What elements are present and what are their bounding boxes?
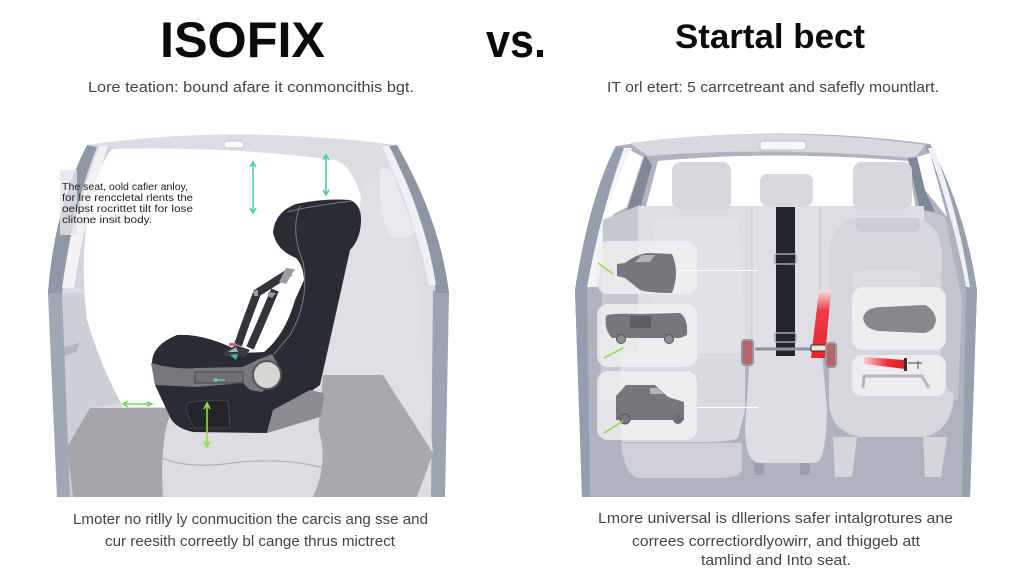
- recline knob: [253, 361, 281, 389]
- side pocket: [187, 400, 230, 428]
- center black strap: [755, 207, 830, 356]
- center seat back: [752, 206, 820, 353]
- caption left: Lmoter no ritlly ly conmucition the carcis ang sse and: [73, 511, 428, 528]
- center seat cushion: [162, 420, 323, 497]
- window opening: [84, 148, 362, 407]
- floor left: [67, 408, 170, 497]
- floor right: [313, 375, 433, 497]
- grey side band: [151, 354, 282, 392]
- title: ISOFIX: ISOFIX: [160, 12, 325, 68]
- side window left: [603, 150, 643, 220]
- right buckle: [826, 343, 836, 367]
- rear window: [645, 156, 916, 210]
- car body shell: [575, 133, 977, 497]
- caption right: Lmore universal is dllerions safer intalgrotures ane: [598, 510, 953, 527]
- right child seat shell: [829, 218, 954, 437]
- far side headrest: [380, 169, 416, 237]
- subtitle left: Lore teation: bound afare it conmoncithis bgt.: [88, 79, 414, 96]
- left backrest: [652, 218, 746, 353]
- lower right pillar: [431, 290, 449, 497]
- pillars inner: [627, 155, 652, 210]
- panel: ISOFIX car interior: [48, 134, 449, 497]
- left headrest: [672, 162, 731, 210]
- caption right: [598, 510, 953, 569]
- red seat belt: [742, 290, 836, 367]
- center console: [745, 353, 827, 463]
- subtitle right: IT orl etert: 5 carrcetreant and safefly mountlart.: [607, 79, 939, 96]
- title: vs.: vs.: [486, 14, 546, 67]
- side trim left: [600, 205, 640, 400]
- left pillar: [575, 146, 624, 497]
- right seat legs: [833, 437, 947, 477]
- door handle: [63, 343, 80, 356]
- window strips: [587, 148, 632, 287]
- caption left: [73, 511, 428, 550]
- inset: side view van: [597, 304, 697, 367]
- left lower: [621, 443, 742, 478]
- inset: top view car: [597, 241, 758, 294]
- roof: [630, 134, 925, 158]
- label plate: [195, 372, 243, 383]
- grab handle: [224, 141, 244, 148]
- green arrows: [123, 155, 329, 447]
- callout text: for lre renccletal rlents the: [62, 193, 193, 204]
- side trim right: [915, 207, 962, 400]
- seat backrest: [152, 200, 361, 433]
- title: Startal bect: Startal bect: [675, 18, 865, 56]
- text panel backing: [60, 170, 77, 235]
- rear bench: [638, 206, 924, 354]
- inset: car top right: [852, 287, 946, 350]
- car body shell: [48, 134, 449, 497]
- inset: front view SUV: [597, 371, 758, 440]
- callout text: oelpst rocrittet tilt for lose: [62, 204, 194, 215]
- inset: belt buckle: [852, 355, 946, 396]
- caption left: cur reesith correetly bl cange thrus mictrect: [105, 533, 396, 550]
- child car seat: [151, 200, 361, 433]
- left cushion: [618, 353, 745, 442]
- side window right: [917, 153, 947, 217]
- callout text: clitone insit body.: [62, 215, 152, 226]
- left buckle: [742, 340, 753, 365]
- piping: [274, 201, 352, 354]
- right headrest: [853, 162, 912, 210]
- shell base: [267, 390, 324, 433]
- buckle: [224, 345, 250, 357]
- harness straps: [238, 272, 290, 348]
- panel: seat belt car interior: [575, 133, 977, 497]
- caption right: correes correctiordlyowirr, and thiggeb att: [632, 533, 921, 550]
- far side seat: [323, 167, 433, 453]
- lower left pillar: [48, 292, 70, 497]
- callout text: The seat, oold cafier anloy,: [62, 182, 188, 193]
- right pillar: [925, 144, 977, 497]
- callout text: [62, 182, 194, 226]
- door left: [50, 293, 123, 497]
- caption right: tamlind and Into seat.: [701, 552, 851, 569]
- center headrest: [760, 174, 813, 206]
